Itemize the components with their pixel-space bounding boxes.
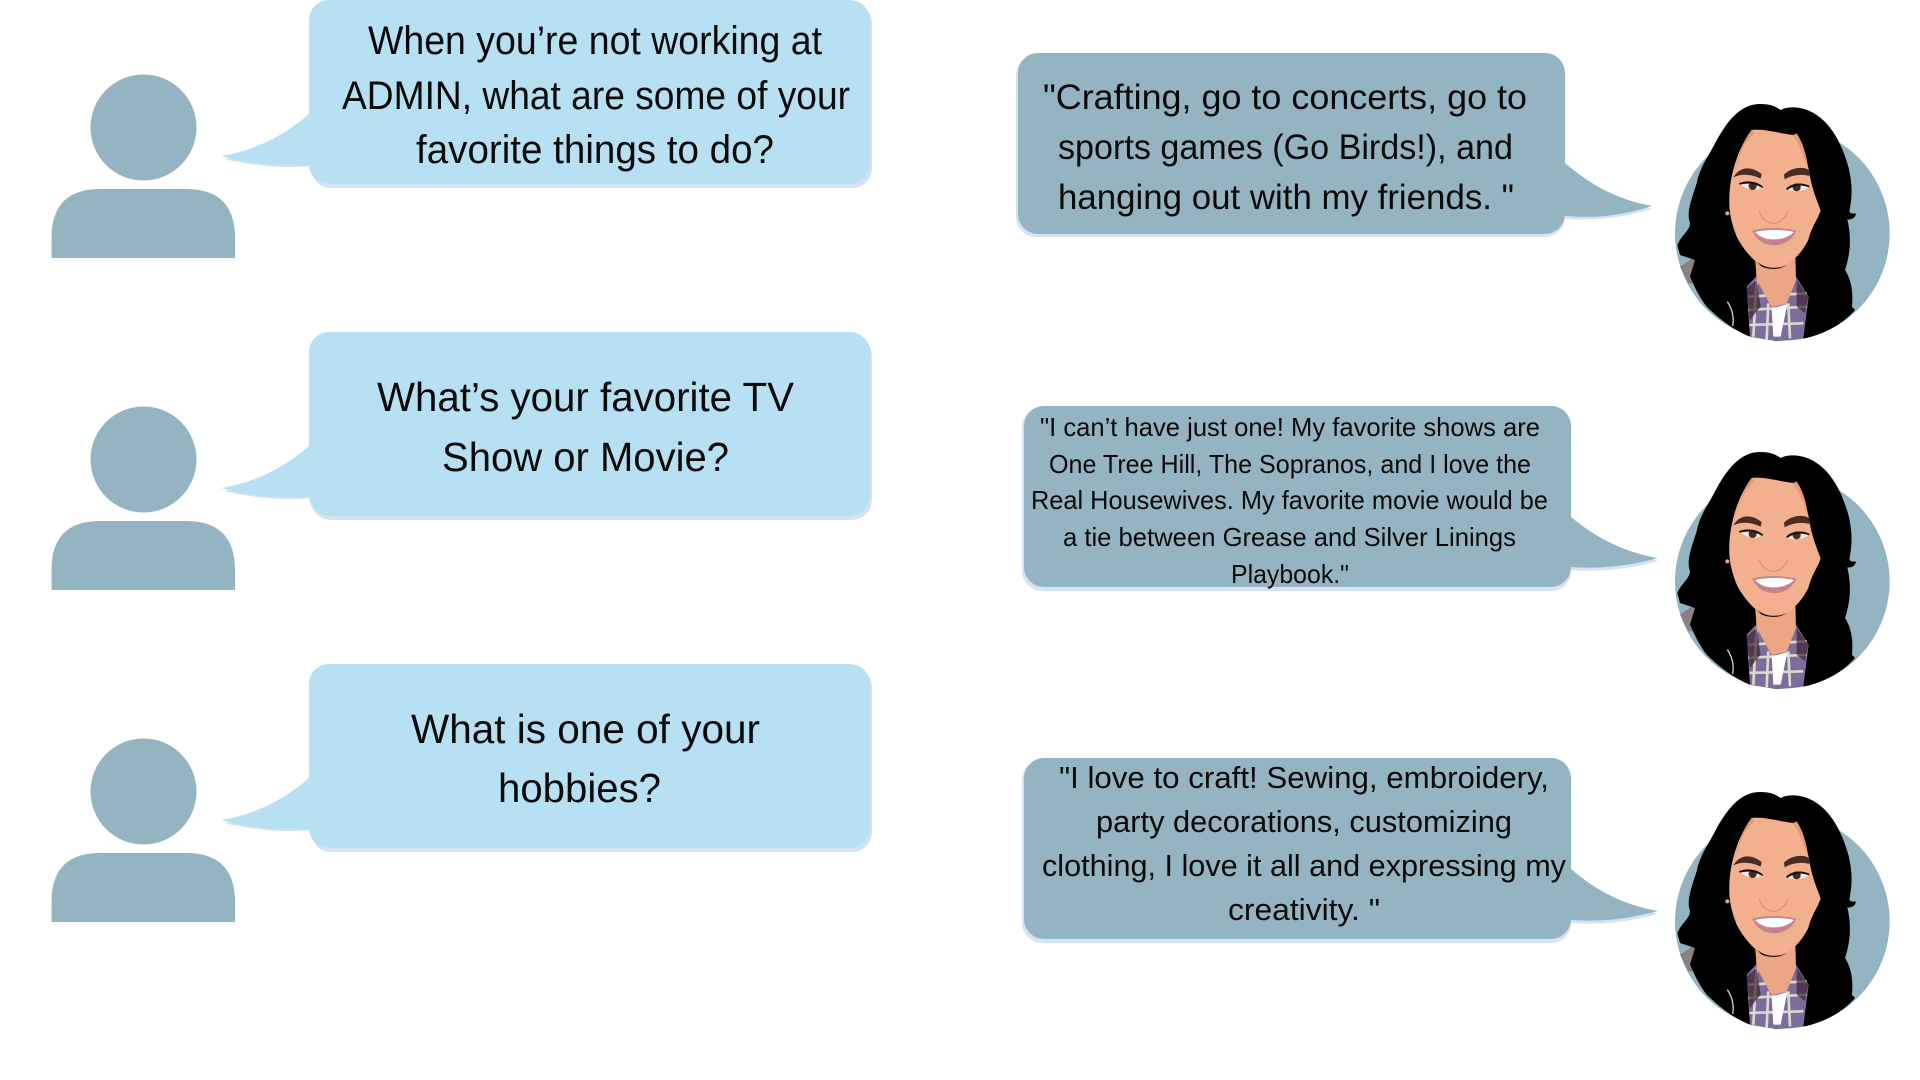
question bubble 2	[221, 332, 872, 520]
question text 2: Show or Movie?	[442, 434, 729, 480]
panel: answer row 3	[1022, 758, 1890, 1029]
answer text 3: party decorations, customizing	[1096, 804, 1512, 839]
question text 3	[411, 706, 760, 811]
question text 1: ADMIN, what are some of your	[342, 74, 850, 118]
avatar 2	[1675, 452, 1890, 689]
answer text 2: One Tree Hill, The Sopranos, and I love the	[1049, 449, 1531, 479]
icon: person 1	[52, 74, 235, 258]
question text 3: What is one of your	[411, 706, 760, 752]
answer text 3: clothing, I love it all and expressing my	[1042, 848, 1566, 883]
question text 3: hobbies?	[498, 765, 661, 811]
answer bubble 1	[1016, 53, 1652, 237]
icon: person 2	[52, 406, 235, 590]
avatar 3	[1675, 792, 1890, 1029]
answer text 1: hanging out with my friends. "	[1058, 178, 1514, 217]
panel: answer row 2	[1022, 406, 1890, 689]
answer text 3: creativity. "	[1228, 892, 1380, 927]
answer text 2: "I can’t have just one! My favorite shows are	[1040, 412, 1540, 442]
answer text 3: "I love to craft! Sewing, embroidery,	[1059, 760, 1549, 795]
answer text 2	[1031, 412, 1548, 589]
avatar 1	[1675, 104, 1890, 341]
question text 2: What’s your favorite TV	[377, 374, 795, 420]
panel: question row 2	[52, 332, 872, 590]
question bubble 1	[221, 0, 872, 188]
question bubble 3	[221, 664, 872, 852]
icon: person 3	[52, 738, 235, 922]
answer text 2: Real Housewives. My favorite movie would be	[1031, 485, 1548, 515]
answer bubble 3	[1022, 758, 1658, 943]
panel: answer row 1	[1016, 53, 1890, 341]
answer text 2: a tie between Grease and Silver Linings	[1063, 522, 1516, 552]
question text 1: When you’re not working at	[368, 19, 822, 63]
answer text 1: "Crafting, go to concerts, go to	[1043, 78, 1527, 117]
question text 2	[377, 374, 795, 480]
panel: question row 1	[52, 0, 872, 258]
question text 1	[342, 19, 850, 172]
answer text 3	[1042, 760, 1566, 927]
answer text 1	[1043, 78, 1527, 217]
panel: question row 3	[52, 664, 872, 922]
question text 1: favorite things to do?	[416, 128, 774, 172]
answer bubble 2	[1022, 406, 1658, 591]
answer text 1: sports games (Go Birds!), and	[1058, 128, 1513, 167]
answer text 2: Playbook."	[1231, 559, 1349, 589]
